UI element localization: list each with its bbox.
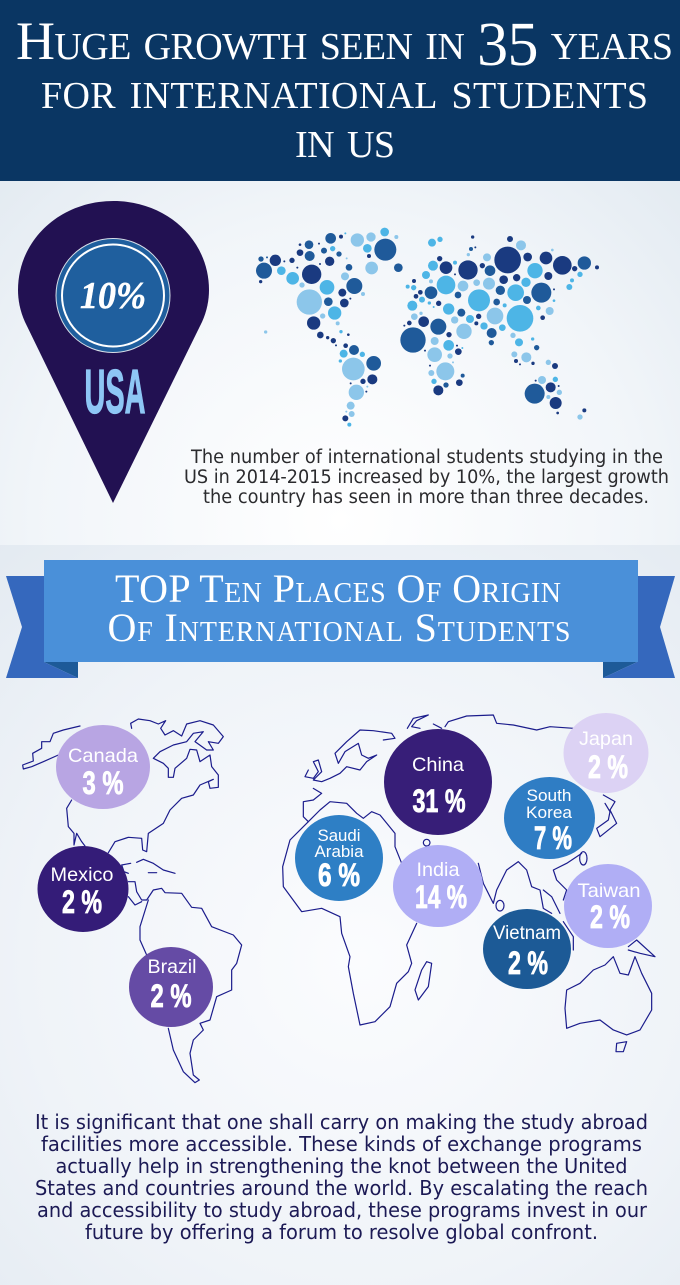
bubble: Canada 3%: Canada xyxy=(68,745,138,767)
icon: map pin with 10% USA xyxy=(18,201,209,503)
dotted map: Americas xyxy=(256,228,403,427)
paragraph: 10% growth summary: The number of international students studying in the xyxy=(190,447,663,468)
ribbon heading: Of International Students xyxy=(108,605,570,650)
bubble: China 31%: China xyxy=(412,754,464,776)
bubble: Japan 2% xyxy=(564,713,648,793)
bubble: Taiwan 2%: Taiwan xyxy=(578,880,640,902)
bubble: China 31%: 31 % xyxy=(412,783,466,819)
background: lower section xyxy=(0,545,680,1285)
bubble: South Korea 7% xyxy=(504,777,595,859)
title banner: in us xyxy=(295,109,395,169)
bubble: China 31% xyxy=(384,729,492,835)
dotted world map xyxy=(256,228,599,427)
bubble: Canada 3%: 3 % xyxy=(82,765,124,801)
ribbon heading xyxy=(6,560,675,678)
title banner: Huge growth seen in xyxy=(16,11,465,71)
bubble: South Korea 7%: South xyxy=(526,786,572,805)
icon: map pin with 10% USA: 10% xyxy=(80,275,146,317)
bubble: Japan 2%: Japan xyxy=(579,728,633,750)
background: upper section xyxy=(0,181,680,545)
map outline: Europe, Africa, Asia, Australia xyxy=(283,715,655,1052)
bubble: Mexico 2% xyxy=(38,846,128,932)
bubble: Mexico 2%: Mexico xyxy=(50,864,114,886)
bubble: India 14%: 14 % xyxy=(415,879,467,915)
icon: map pin with 10% USA: USA xyxy=(84,358,146,427)
paragraph: study abroad closing text: States and countries around the world. By escalating the reach xyxy=(35,1176,648,1200)
bubble: Taiwan 2%: 2 % xyxy=(590,899,630,935)
bubble: Saudi Arabia 6%: 6 % xyxy=(318,857,360,893)
paragraph: study abroad closing text: It is significant that one shall carry on making the study abroad xyxy=(35,1110,648,1134)
bubble: Vietnam 2%: 2 % xyxy=(508,945,548,981)
dotted map: Europe, Africa, Asia, Australia xyxy=(400,235,599,420)
paragraph: 10% growth summary xyxy=(184,447,669,508)
bubble: Saudi Arabia 6%: Arabia xyxy=(314,842,364,861)
bubble: South Korea 7%: Korea xyxy=(526,803,573,822)
bubble: Saudi Arabia 6%: Saudi xyxy=(318,826,360,845)
title banner: for international students xyxy=(41,60,648,120)
map outline: Americas xyxy=(23,719,242,1083)
bubble: Mexico 2%: 2 % xyxy=(62,884,102,920)
ribbon heading: TOP Ten Places Of Origin xyxy=(115,566,561,611)
bubble: Vietnam 2%: Vietnam xyxy=(493,922,561,944)
bubble: India 14% xyxy=(393,845,483,927)
bubble: South Korea 7%: 7 % xyxy=(534,820,572,856)
bubble: India 14%: India xyxy=(416,859,460,881)
bubble: Brazil 2%: Brazil xyxy=(148,956,196,978)
paragraph: 10% growth summary: the country has seen in more than three decades. xyxy=(203,487,649,508)
bubble: Saudi Arabia 6% xyxy=(295,815,383,901)
title banner xyxy=(0,0,680,181)
bubble: Brazil 2%: 2 % xyxy=(150,978,192,1014)
bubble: Canada 3% xyxy=(56,725,150,809)
bubble: Taiwan 2% xyxy=(564,864,652,948)
paragraph: study abroad closing text: future by offering a forum to resolve global confront. xyxy=(85,1220,598,1244)
title banner: years xyxy=(538,11,673,71)
bubble: Vietnam 2% xyxy=(483,909,571,989)
paragraph: study abroad closing text xyxy=(35,1110,648,1244)
paragraph: 10% growth summary: US in 2014-2015 increased by 10%, the largest growth xyxy=(184,467,669,488)
title banner: 35 xyxy=(477,11,538,79)
paragraph: study abroad closing text: facilities more accessible. These kinds of exchange programs xyxy=(41,1132,642,1156)
paragraph: study abroad closing text: and accessibility to study abroad, these programs invest in our xyxy=(37,1198,648,1222)
bubble: Brazil 2% xyxy=(129,947,213,1027)
paragraph: study abroad closing text: actually help in strengthening the knot between the United xyxy=(56,1154,628,1178)
bubble: Japan 2%: 2 % xyxy=(588,749,628,785)
